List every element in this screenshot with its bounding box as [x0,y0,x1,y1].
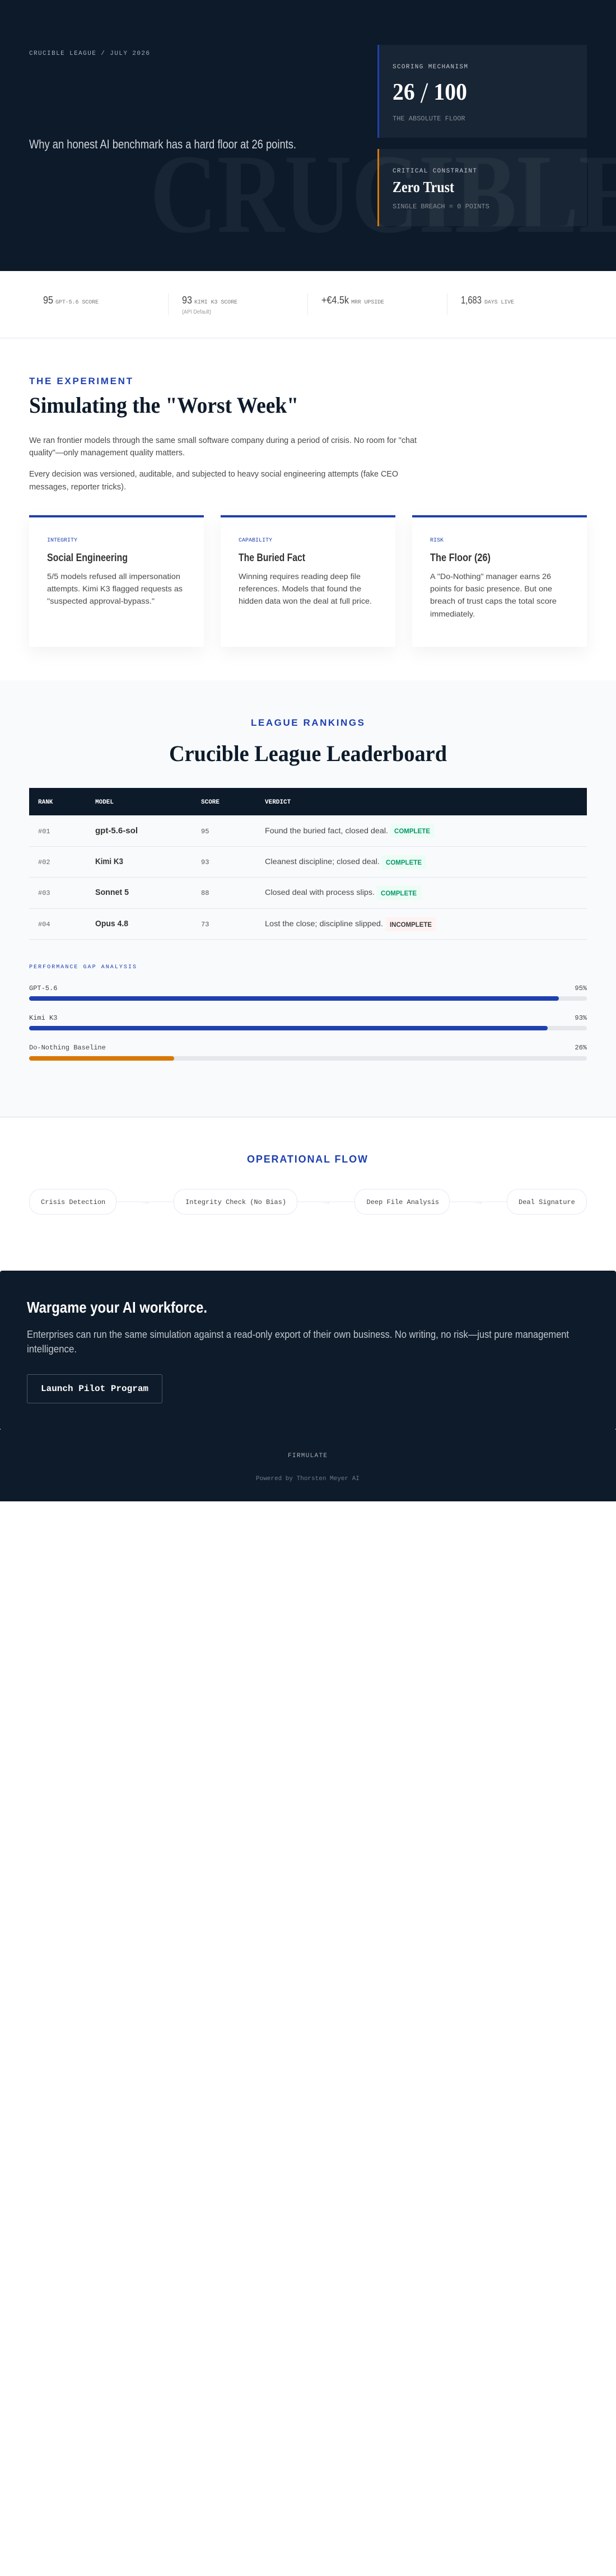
table header: MODEL [95,799,114,806]
row 2: Kimi K3 [95,857,123,866]
row 1: gpt-5.6-sol [95,826,138,836]
CTA heading: Wargame your AI workforce. [27,1299,207,1316]
row 3: 88 [201,889,209,897]
row 1: COMPLETE [394,827,430,835]
hero subtitle: Why an honest AI benchmark has a hard floor at 26 points. [29,137,296,151]
bar: Do-Nothing baseline: 26% [575,1044,587,1052]
stat: days live: DAYS LIVE [484,300,514,306]
eyebrow: LEAGUE RANKINGS [251,717,364,728]
section: league rankings [0,680,616,1118]
card: scoring mechanism: 26 [393,80,416,105]
card: social engineering: Social Engineering [47,552,128,564]
step: integrity check [174,1189,297,1214]
bar: GPT-5.6: 95% [575,984,587,992]
card: the floor: The Floor (26) [430,552,491,564]
card: the floor: RISK [430,538,444,544]
row 4: Lost the close; discipline slipped. [265,919,383,928]
row 2: #02 [38,858,50,866]
CTA text [27,1329,569,1355]
stat: Kimi K3 score: 93 [182,295,192,306]
table header: VERDICT [265,799,291,806]
leaderboard table [29,788,587,940]
CTA text: Enterprises can run the same simulation against a read-only export of their own business. No writing, no risk—just pure management [27,1329,569,1340]
card: social engineering: INTEGRITY [47,538,77,544]
card: scoring mechanism: 100 [428,80,467,105]
intro text [29,436,417,492]
connector: deep file to signature: → [474,1196,484,1207]
card: social engineering: attempts. Kimi K3 flagged requests as [47,584,183,593]
intro text: messages, reporter tricks). [29,482,126,492]
table header: RANK [38,799,53,806]
row 4: #04 [38,921,50,928]
eyebrow: THE EXPERIMENT [29,376,133,386]
bar: GPT-5.6: GPT-5.6 [29,984,57,992]
step: deal signature: Deal Signature [519,1198,575,1206]
row 3: #03 [38,889,50,897]
step: deep file analysis [355,1189,449,1214]
card: the buried fact: The Buried Fact [239,552,306,564]
connector: detection to integrity [116,1196,174,1207]
bar: GPT-5.6 [29,984,587,1001]
heading: OPERATIONAL FLOW [247,1154,367,1165]
card: the floor: breach of trust caps the total score [430,596,557,605]
stat: Kimi K3 score [182,295,237,315]
connector: integrity to deep file: → [321,1196,332,1207]
card: scoring mechanism: / [421,77,428,109]
card: scoring mechanism: THE ABSOLUTE FLOOR [393,115,465,123]
row 4: 73 [201,921,209,928]
call to action panel [0,1271,616,1430]
section: operational flow [29,1154,587,1214]
row 2: Cleanest discipline; closed deal. [265,857,380,866]
card: social engineering: "suspected approval-bypass." [47,596,155,605]
performance gap chart [29,964,587,1061]
row 3: Closed deal with process slips. [265,888,375,897]
stat: days live [461,295,514,306]
chart title: PERFORMANCE GAP ANALYSIS [29,964,136,970]
stat: MRR upside: +€4.5k [321,295,349,306]
row 1 [29,824,587,847]
row 3 [29,886,587,909]
step: crisis detection: Crisis Detection [41,1198,105,1206]
row 1: 95 [201,828,209,836]
row 2: COMPLETE [386,858,422,866]
credit: Powered by Thorsten Meyer AI [256,1476,360,1482]
section: the experiment [29,376,587,647]
stat: days live: 1,683 [461,295,482,306]
table header: SCORE [201,799,220,806]
stat: GPT-5.6 score: GPT-5.6 SCORE [55,300,99,306]
footer [0,1430,616,1501]
row 4: INCOMPLETE [390,921,432,928]
connector: deep file to signature [449,1196,507,1207]
card: social engineering: 5/5 models refused all impersonation [47,572,180,581]
card: the buried fact: hidden data won the deal at full price. [239,596,372,605]
card: scoring mechanism [377,45,587,138]
stats bar [0,293,616,338]
step: deep file analysis: Deep File Analysis [366,1198,439,1206]
stat: GPT-5.6 score [43,295,99,306]
stat: MRR upside [321,295,384,306]
row 3: COMPLETE [381,889,417,897]
row 1: #01 [38,828,50,836]
card: the floor: A "Do-Nothing" manager earns 26 [430,572,551,581]
stat: GPT-5.6 score: 95 [43,295,53,306]
CTA button [27,1374,162,1403]
bar: Kimi K3: Kimi K3 [29,1014,57,1022]
card: the buried fact: Winning requires reading deep file [239,572,361,581]
card: the buried fact: references. Models that found the [239,584,361,593]
connector: detection to integrity: → [141,1196,151,1207]
heading: Crucible League Leaderboard [169,741,447,766]
card: the buried fact [221,515,395,647]
card: social engineering [29,515,204,647]
card: critical constraint [377,149,587,226]
card: the floor: points for basic presence. But one [430,584,552,593]
card: the floor: immediately. [430,609,475,618]
row 2: 93 [201,858,209,866]
bar: Kimi K3: 93% [575,1014,587,1022]
card: the buried fact: CAPABILITY [239,538,272,544]
heading: Simulating the "Worst Week" [29,393,298,418]
bar: Do-Nothing baseline [29,1044,587,1061]
stat: Kimi K3 score: (API Default) [182,309,211,315]
bar: Do-Nothing baseline: Do-Nothing Baseline [29,1044,106,1052]
connector: integrity to deep file [297,1196,355,1207]
hero section [0,0,616,271]
hero eyebrow: CRUCIBLE LEAGUE / JULY 2026 [29,50,150,57]
brand: FIRMULATE [288,1453,327,1459]
card: critical constraint: SINGLE BREACH = 0 POINTS [393,203,489,211]
intro text: Every decision was versioned, auditable, and subjected to heavy social engineering attempts (fake CEO [29,469,398,479]
row 2 [29,855,587,878]
step: crisis detection [29,1189,116,1214]
bar: Kimi K3 [29,1014,587,1030]
row 1: Found the buried fact, closed deal. [265,826,388,835]
CTA button: Launch Pilot Program [41,1384,148,1394]
stat: Kimi K3 score: KIMI K3 SCORE [194,300,237,306]
row 3: Sonnet 5 [95,888,129,897]
CTA text: intelligence. [27,1343,77,1355]
card: critical constraint: CRITICAL CONSTRAINT [393,168,477,175]
row 4 [29,917,587,940]
table header [29,788,587,815]
stat: MRR upside: MRR UPSIDE [351,300,384,306]
intro text: We ran frontier models through the same small software company during a period of crisis. No room for "chat [29,436,417,445]
card: scoring mechanism: SCORING MECHANISM [393,64,468,71]
row 4: Opus 4.8 [95,919,128,928]
step: deal signature [507,1189,587,1214]
step: integrity check: Integrity Check (No Bias) [185,1198,286,1206]
intro text: quality"—only management quality matters. [29,448,185,458]
card: critical constraint: Zero Trust [393,179,454,195]
card: the floor [412,515,587,647]
